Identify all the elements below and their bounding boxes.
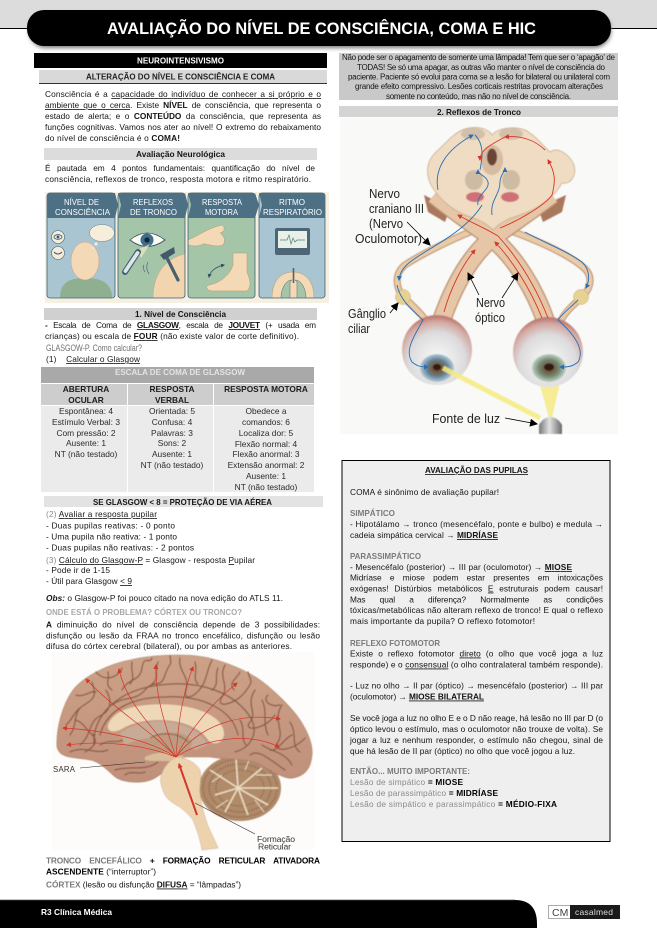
text block: cálculo do glasgow-p: - Útil para Glasgow < 9 [46,576,132,586]
label: SARA: SARA [53,765,76,774]
brainstem [161,757,218,850]
column: resposta verbal: Ausente: 1 [152,449,192,459]
text block: 4 pontos: É pautada em 4 pontos fundamentais: quantificação do nível de [45,163,315,173]
panel: avaliação das pupilas [342,460,610,842]
panel: reflexos de tronco: REFLEXOS [133,198,173,207]
callout: apagão: grande efeito compressivo. Lesões corticais restritas provocam alterações [355,82,603,91]
column: abertura ocular: ABERTURA [63,384,109,394]
section: reflexo fotomotor: óptico levou o estímulo, mas o oculomotor não trouxe de volta). Se [350,724,603,734]
table: escala de coma de glasgow [41,367,314,492]
section: reflexo fotomotor: Existe o reflexo fotomotor direto (o olho que você joga a luz [350,648,603,658]
label: nervo craniano III: Nervo [369,186,400,201]
heading: 1. nível de consciência: 1. Nível de Consciência [135,309,226,319]
callout: apagão [339,53,618,101]
column: resposta verbal: VERBAL [155,395,189,405]
column: resposta motora: Ausente: 1 [246,471,286,481]
panel: reflexos de tronco: DE TRONCO [130,208,177,217]
section: reflexo fotomotor: que há lesão de II par (óptico) no olho que você jogou a luz. [350,746,575,756]
section: parassimpático: tóxicas/metabólicas não alteram reflexo de tronco! E qual o reflexo [350,605,603,615]
section: simpático [350,508,603,540]
text block: cálculo do glasgow-p: - Pode ir de 1-15 [46,565,110,575]
panel: resposta motora: MOTORA [205,208,239,217]
text block: escalas: crianças) ou escala de FOUR (não existe valor de corte definitivo). [45,331,299,341]
section: parassimpático: Midríase e miose podem estar presentes em intoxicações [350,572,603,582]
section: simpático: - Hipotálamo → tronco (mesencéfalo, ponte e bulbo) e medula → [350,519,603,529]
text block: resposta pupilar: - Uma pupila não reativa: - 1 ponto [46,532,177,542]
column: resposta motora: Flexão normal: 4 [235,439,298,449]
text block: definição de consciência: estado de alerta; e o CONTEÚDO da consciência, que representa as [45,110,321,121]
text block: tronco e córtex: ASCENDENTE (“interruptor”) [46,866,156,876]
section: reflexo fotomotor: (oculomotor) → MIOSE BILATERAL [350,692,484,702]
wedge-shaped ends beside the midbrain [424,195,450,222]
text block: 4 pontos: consciência, reflexos de tronco, resposta motora e ritmo respiratório. [45,174,311,184]
text block: três possibilidades [46,620,320,651]
arrows: vias eferentes azuis [397,135,589,367]
section: parassimpático: mais importante da pupila? O reflexo fotomotor! [350,616,535,626]
section: parassimpático: Mas qual a diferença? Normalmente as condições [350,594,603,604]
section: reflexo fotomotor: Se você joga a luz no olho E e o D não reage, há lesão no III par D (o [350,713,603,723]
logo: casalmed [548,905,620,919]
column: resposta motora: RESPOSTA MOTORA [224,384,308,394]
label: nervo craniano III: (Nervo [369,216,403,231]
section: parassimpático [350,551,603,626]
column: resposta verbal [141,384,204,470]
column: resposta motora: Localiza dor: 5 [239,428,294,438]
section: reflexo fotomotor [349,638,603,756]
column: resposta motora [224,384,308,492]
text block: três possibilidades: disfunção ou lesão da FRAA no tronco encefálico, disfunção ou lesão [46,630,320,640]
callout: proteção de via aérea [44,496,323,507]
column: resposta motora: Extensão anormal: 2 [228,460,305,470]
text block: 4 pontos [45,163,315,184]
arrows: projeções da SARA [63,665,280,815]
section: muito importante: Lesão de simpático = MIOSE [350,777,463,787]
subheading: onde está o problema: ONDE ESTÁ O PROBLEMA? CÓRTEX OU TRONCO? [46,606,242,617]
cerebrum [57,655,312,782]
note: observação: Obs: o Glasgow-P foi pouco citado na nova edição do ATLS 11. [46,593,283,603]
panel: ritmo respiratório: RITMO [279,198,305,207]
column: resposta verbal: RESPOSTA [149,384,195,394]
panel: nível de consciência: NÍVEL DE [64,198,99,207]
section: reflexo fotomotor: REFLEXO FOTOMOTOR [350,638,440,648]
infographic: 4 pontos fundamentais [45,192,329,303]
ganglia [396,290,410,304]
heading: avaliação das pupilas: AVALIAÇÃO DAS PUPILAS [425,465,528,475]
column: resposta verbal: Sons: 2 [158,438,187,448]
column: abertura ocular: Espontânea: 4 [59,406,113,416]
optic tracts [441,195,552,322]
table: escala de coma de glasgow: ESCALA DE COMA DE GLASGOW [115,367,245,377]
section banner: neurointensivismo [34,53,327,68]
eyes [402,315,472,385]
section: muito importante [350,766,557,809]
heading: alteração do nível: ALTERAÇÃO DO NÍVEL E CONSCIÊNCIA E COMA [86,70,275,82]
arrows: vias aferentes vermelhas [444,137,554,318]
oculomotor nerves [397,232,470,322]
column: abertura ocular: Com pressão: 2 [56,428,116,438]
text block: definição de consciência: ambiente que o cerca. Existe NÍVEL de consciência, que representa o [45,100,321,110]
heading: 2. reflexos de tronco: 2. Reflexos de Tronco [437,107,521,117]
callout: apagão: Não pode ser o apagamento de somente uma lâmpada! Tem que ser o ‘apagão’ de [342,53,616,62]
column: abertura ocular [52,384,120,459]
text block: definição de consciência [45,89,321,143]
column: resposta verbal: Palavras: 3 [151,428,193,438]
text block: tronco e córtex: CÓRTEX (lesão ou disfunção DIFUSA = “lâmpadas”) [46,878,241,890]
panel: ritmo respiratório [259,193,325,298]
label: formação reticular: Formação [257,834,295,844]
text block: resposta pupilar: - Duas pupilas não reativas: - 2 pontos [46,542,194,552]
panel: resposta motora [188,193,259,298]
label: nervo craniano III [355,186,430,246]
section: simpático: SIMPÁTICO [350,508,396,518]
column: abertura ocular: Estímulo Verbal: 3 [52,417,120,427]
midbrain [428,128,575,230]
heading: 1. nível de consciência [44,308,317,320]
section: muito importante: ENTÃO... MUITO IMPORTANTE: [350,766,470,776]
text block: escalas: - Escala de Coma de GLASGOW, escala de JOUVET (+ usada em [45,320,316,330]
section: reflexo fotomotor: jogar a luz e nenhum responder, o estímulo não chegou, sinal de [349,735,603,745]
callout: apagão: paciente. Paciente só evolui para coma se a lesão for bilateral ou unilateral com [348,72,610,82]
footer bar [0,899,537,928]
corpus callosum [108,704,224,743]
section banner: neurointensivismo: NEUROINTENSIVISMO [137,56,225,66]
text block: escalas: GLASGOW-P. Como calcular? [46,343,142,353]
text block: resposta pupilar: - Duas pupilas reativas: - 0 ponto [46,520,175,530]
label: gânglio ciliar [348,303,398,336]
column: abertura ocular: NT (não testado) [55,449,118,459]
text block: resposta pupilar: (2) Avaliar a resposta pupilar [46,509,157,519]
heading: avaliação neurológica: Avaliação Neurológica [136,149,225,159]
light source [539,417,562,434]
column: resposta motora: comandos: 6 [242,417,290,427]
label: nervo óptico: óptico [475,310,505,325]
text block: resposta pupilar [46,509,194,552]
label: SARA [53,762,145,774]
text block: definição de consciência: do nível de consciência é o COMA! [45,133,180,143]
section: reflexo fotomotor: responde) e o consensual (o olho contralateral também responde). [350,660,603,670]
text block: definição de consciência: funções cognitivas. Vamos nos ater ao nível! O extremo do rebaixamento [45,122,321,132]
text: sinônimo: COMA é sinônimo de avaliação pupilar! [350,487,499,497]
heading: alteração do nível [39,70,327,84]
column: resposta motora: Obedece a [246,406,287,416]
text block: cálculo do glasgow-p: (3) Cálculo do Glasgow-P = Glasgow - resposta Pupilar [46,555,255,565]
text block: tronco e córtex [46,856,320,890]
panel: reflexos de tronco [118,193,188,298]
panel: nível de consciência [47,193,118,298]
label: formação reticular: Reticular [258,842,291,852]
light beams [538,378,561,418]
column: abertura ocular: Ausente: 1 [66,438,106,448]
text block: três possibilidades: A diminuição do nível de consciência depende de 3 possibilidades: [46,620,320,630]
label: nervo óptico [468,273,518,325]
label: fonte de luz [432,411,537,426]
section: parassimpático: - Mesencéfalo (posterior) → III par (oculomotor) → MIOSE [350,562,572,572]
label: gânglio ciliar: Gânglio [348,306,386,321]
section: reflexo fotomotor: - Luz no olho → II par (óptico) → mesencéfalo (posterior) → III par [350,680,603,690]
section: muito importante: Lesão de simpático e parassimpático = MÉDIO-FIXA [350,799,557,809]
callout: apagão: TODAS! Se só uma apagar, as outras vão manter o nível de consciência do [357,63,606,72]
label: nervo craniano III: Oculomotor) [355,231,422,246]
column: resposta motora: Flexão anormal: 3 [232,449,300,459]
logo: casalmed: casalmed [575,907,613,917]
logo: casalmed: CM [552,907,568,919]
panel: resposta motora: RESPOSTA [202,198,243,207]
footer bar: R3 Clínica Médica [41,907,112,917]
column: resposta verbal: Confusa: 4 [152,417,193,427]
image: via do reflexo fotomotor [340,118,618,434]
callout: proteção de via aérea: SE GLASGOW < 8 = PROTEÇÃO DE VIA AÉREA [93,497,272,507]
section: parassimpático: exógenas! Distúrbios metabólicos E estruturais podem causar! [350,584,603,594]
column: abertura ocular: OCULAR [68,395,104,405]
panel: ritmo respiratório: RESPIRATÓRIO [263,208,322,217]
text block: três possibilidades: difusa do córtex cerebral (bilateral), ou por ambas as anteriores. [46,641,292,651]
label: formação reticular [195,803,295,852]
column: resposta verbal: Orientada: 5 [149,406,195,416]
text block: definição de consciência: Consciência é a capacidade do indivíduo de conhecer a si próprio e o [45,89,321,99]
image: corte sagital do encéfalo com SARA [52,652,314,852]
cerebellum [199,755,281,821]
section: muito importante: Lesão de parassimpático = MIDRÍASE [350,788,498,798]
text block: escalas: (1) Calcular o Glasgow [46,354,141,364]
section: parassimpático: PARASSIMPÁTICO [350,551,422,561]
gyri [70,682,94,735]
heading: avaliação neurológica [44,148,317,160]
header band [0,0,657,48]
label: fonte de luz: Fonte de luz [432,411,500,426]
text block: tronco e córtex: TRONCO ENCEFÁLICO + FORMAÇÃO RETICULAR ATIVADORA [46,856,320,866]
panel: nível de consciência: CONSCIÊNCIA [55,208,111,217]
column: resposta motora: NT (não testado) [235,482,298,492]
column: resposta verbal: NT (não testado) [141,460,204,470]
text block: cálculo do glasgow-p [46,555,255,586]
callout: apagão: somente no conteúdo, mas não no nível de consciência. [386,92,571,101]
text block: escalas [45,320,316,364]
label: gânglio ciliar: ciliar [348,321,371,336]
label: nervo óptico: Nervo [476,295,505,310]
label: nervo craniano III: craniano III [369,201,424,216]
section: simpático: cadeia simpática cervical → MIDRÍASE [350,530,498,540]
title: AVALIAÇÃO DO NÍVEL DE CONSCIÊNCIA, COMA E HIC [107,18,536,38]
heading: 2. reflexos de tronco [339,106,618,117]
